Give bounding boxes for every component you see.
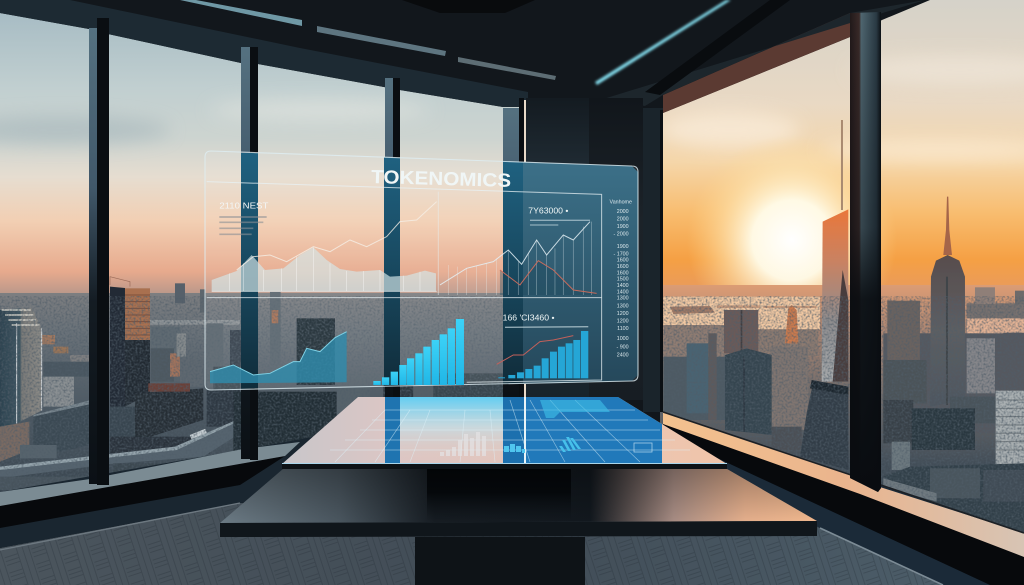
chart 5: blue bar chart with trend line (497, 331, 588, 378)
right-hand number scale: 1900 (617, 244, 629, 250)
right-hand number scale: 1500 (617, 277, 629, 283)
chart 1 label (219, 200, 269, 234)
table projected bars (440, 400, 652, 456)
right-hand number scale: - 900 (616, 344, 629, 350)
chart 4: cyan bar chart (373, 319, 464, 385)
table blue reflection bands (385, 397, 662, 464)
lower table slab (220, 469, 817, 537)
right-hand number scale: - 2000 (614, 232, 629, 238)
right-hand number scale: 2400 (617, 353, 629, 359)
left window sill (0, 398, 525, 550)
chart 2 label (528, 206, 590, 225)
right window sill (663, 412, 1024, 585)
sun (694, 166, 890, 285)
window mullions (89, 12, 881, 492)
right-hand number scale: 1600 (617, 264, 629, 270)
right-hand number scale: 1600 (617, 270, 629, 276)
chart 1: area chart (212, 202, 437, 291)
right-hand number scale (610, 199, 632, 359)
panel tinted mullions (241, 153, 523, 389)
ceiling (0, 0, 930, 113)
chart 2 label: 7Y63000 • (528, 206, 568, 216)
right-hand number scale: Vanhome (610, 199, 632, 205)
upper table neck (427, 469, 571, 521)
holographic tokenomics panel (205, 151, 638, 390)
panel title: TOKENOMICS (371, 167, 511, 192)
right-hand number scale: 1300 (617, 296, 629, 302)
floor carpet (0, 503, 945, 585)
ceiling light strip 1 (180, 0, 302, 26)
right-hand number scale: 1900 (617, 224, 629, 230)
left skyline view (0, 0, 527, 500)
central column (523, 98, 663, 412)
right-hand number scale: - 1700 (614, 251, 629, 257)
right-hand number scale: 2000 (617, 216, 629, 222)
ceiling vent (402, 0, 535, 13)
right-hand number scale: 2000 (617, 209, 629, 215)
right-hand number scale: 1400 (617, 283, 629, 289)
ceiling cyan light strip (595, 0, 731, 85)
right-hand number scale: 1000 (617, 336, 629, 342)
table pedestal column (415, 537, 585, 585)
chart 5 label: 166 'CI3460 • (503, 313, 554, 323)
right-hand number scale: 1400 (617, 289, 629, 295)
right-hand number scale: 1200 (617, 311, 629, 317)
ceiling light strip 2 (317, 26, 446, 56)
right-hand number scale: 1100 (617, 326, 629, 332)
upper display table (282, 397, 727, 469)
chart 2: line chart with two series (440, 222, 597, 295)
table projected grid (330, 400, 690, 462)
right-hand number scale: 1300 (617, 304, 629, 310)
right-hand number scale: 1600 (617, 258, 629, 264)
chart 3: blue area chart (210, 332, 347, 383)
chart 5 label (503, 313, 588, 327)
chart 1 label: 2110 NEST (219, 200, 269, 210)
right skyline view with setting sun (660, 0, 1024, 560)
ceiling light strip 3 (458, 57, 556, 80)
panel tinted section over column (523, 162, 638, 384)
right-hand number scale: 1200 (617, 318, 629, 324)
